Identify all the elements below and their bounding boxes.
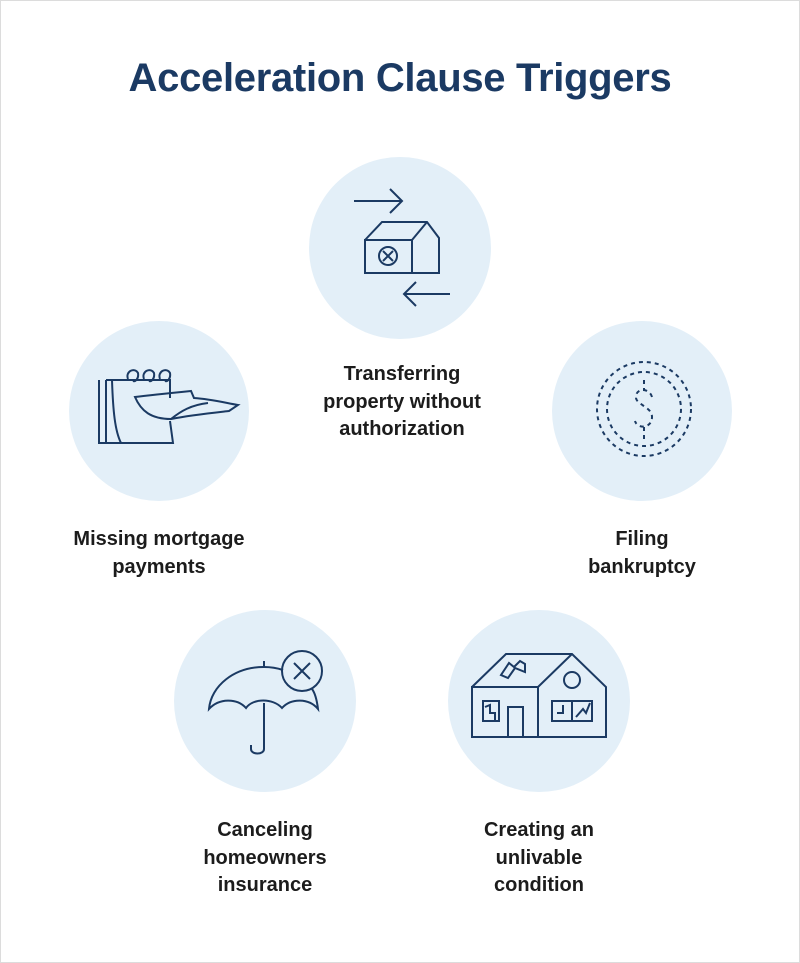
label: insurance <box>203 819 327 896</box>
label: transferring: authorization <box>339 418 465 440</box>
label: unlivable: unlivable <box>496 846 582 868</box>
circle: bankruptcy <box>552 321 732 501</box>
circle: missing payments <box>69 321 249 501</box>
icon: calendar <box>99 370 238 443</box>
label: transferring <box>323 363 481 440</box>
circle: unlivable <box>448 610 630 792</box>
label: transferring: property without <box>323 390 481 412</box>
label: unlivable: Creating an <box>484 819 594 841</box>
label: insurance: insurance <box>218 874 312 896</box>
icon: umbrella <box>209 651 322 754</box>
circle: transferring <box>309 157 491 339</box>
label: bankruptcy: bankruptcy <box>588 556 696 578</box>
label: insurance: Canceling <box>217 819 313 841</box>
label: insurance: homeowners <box>203 846 327 868</box>
label: unlivable: condition <box>494 874 584 896</box>
label: bankruptcy <box>588 528 696 578</box>
label: transferring: Transferring <box>344 363 460 385</box>
icon: house transfer <box>354 189 450 306</box>
label: missing payments: Missing mortgage <box>73 528 245 550</box>
label: missing payments: payments <box>112 556 206 578</box>
label: bankruptcy: Filing <box>615 528 669 550</box>
icon: damaged house <box>472 654 606 737</box>
label: missing payments <box>73 528 245 578</box>
title: Acceleration Clause Triggers <box>129 56 671 100</box>
label: unlivable <box>484 819 594 896</box>
icon: dollar coin <box>597 362 691 456</box>
circle: insurance <box>174 610 356 792</box>
